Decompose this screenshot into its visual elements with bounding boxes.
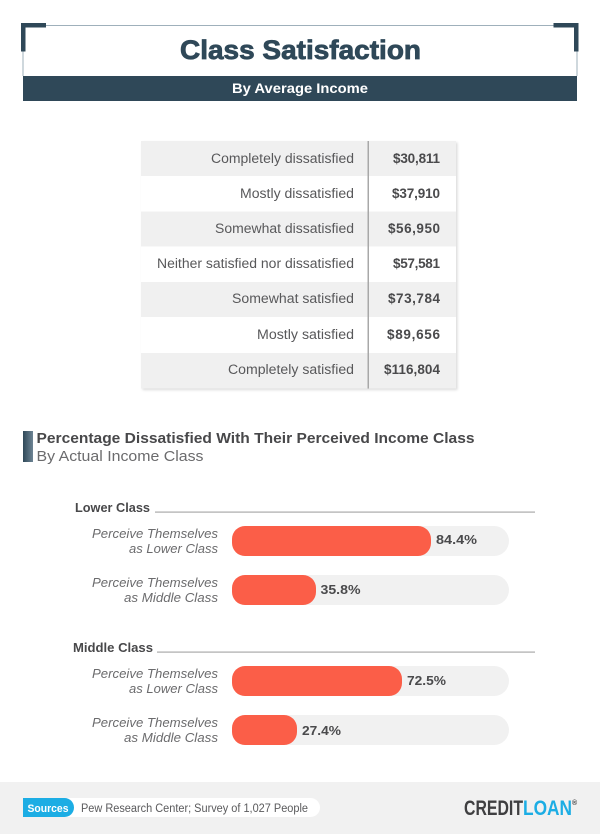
group label: Lower Class [75, 501, 150, 515]
bar: perceive lower: as Lower Class [129, 542, 218, 556]
row: somewhat satisfied: $73,784 [388, 291, 440, 306]
icon: top right corner bracket [554, 23, 578, 52]
sources tag [23, 798, 74, 817]
heading text: Percentage Dissatisfied With Their Perceived Income Class [36, 431, 474, 447]
footer: LOAN [523, 797, 572, 820]
bar: perceive middle: 27.4% [302, 723, 341, 738]
row: mostly dissatisfied: $37,910 [392, 186, 440, 201]
row: neither: Neither satisfied nor dissatisfied [157, 256, 354, 271]
bar: perceive lower: Perceive Themselves [92, 667, 218, 681]
income table [141, 141, 456, 388]
bar: perceive lower [92, 666, 509, 696]
bar: perceive middle: as Middle Class [124, 591, 218, 605]
row: completely satisfied: $116,804 [384, 362, 440, 377]
row: completely dissatisfied: Completely dissatisfied [211, 151, 354, 166]
section heading [23, 431, 474, 465]
title: Class Satisfaction [180, 35, 421, 65]
bar: perceive middle: 35.8% [320, 582, 361, 597]
logo: CREDIT [464, 797, 523, 820]
bar: perceive lower [92, 526, 509, 556]
footer background [0, 782, 600, 834]
bar: perceive lower: as Lower Class [129, 682, 218, 696]
row: completely satisfied: Completely satisfied [228, 362, 354, 377]
sources pill [23, 798, 320, 817]
row: mostly dissatisfied [240, 186, 440, 201]
row: somewhat satisfied: Somewhat satisfied [232, 291, 354, 306]
chart: lower class [75, 501, 535, 605]
footer [0, 782, 600, 834]
row: neither [157, 256, 440, 271]
bar: perceive middle [92, 575, 509, 605]
subtitle: By Average Income [232, 80, 368, 96]
row: completely dissatisfied: $30,811 [393, 151, 440, 166]
bar: perceive lower: 72.5% [407, 673, 446, 688]
heading subtext: By Actual Income Class [36, 449, 204, 465]
heading accent bar [23, 431, 33, 462]
subtitle band [23, 76, 577, 101]
bar: perceive lower: Perceive Themselves [92, 527, 218, 541]
row: mostly satisfied: Mostly satisfied [257, 327, 354, 342]
icon: top left corner bracket [21, 23, 46, 52]
footer: ® [572, 799, 578, 807]
row: mostly satisfied: $89,656 [387, 327, 440, 342]
row: mostly dissatisfied: Mostly dissatisfied [240, 186, 354, 201]
row: somewhat dissatisfied: $56,950 [388, 221, 440, 236]
chart: middle class [73, 641, 535, 745]
row: neither: $57,581 [393, 256, 440, 271]
bar: perceive lower: 84.4% [436, 532, 477, 547]
row: completely dissatisfied [211, 151, 440, 166]
header frame [23, 26, 577, 76]
bar: perceive middle [92, 715, 509, 745]
bar: perceive middle: Perceive Themselves [92, 716, 218, 730]
sources text: Pew Research Center; Survey of 1,027 People [81, 803, 308, 815]
sources label: Sources [28, 803, 68, 815]
table divider [368, 141, 369, 388]
row: somewhat dissatisfied: Somewhat dissatisfied [215, 221, 354, 236]
row: somewhat dissatisfied [215, 221, 440, 236]
header [21, 23, 578, 101]
row: mostly satisfied [257, 327, 440, 342]
bar: perceive middle: Perceive Themselves [92, 576, 218, 590]
group label: Middle Class [73, 641, 153, 655]
row: completely satisfied [228, 362, 440, 377]
table background [141, 141, 456, 388]
row: somewhat satisfied [232, 291, 440, 306]
bar: perceive middle: as Middle Class [124, 731, 218, 745]
